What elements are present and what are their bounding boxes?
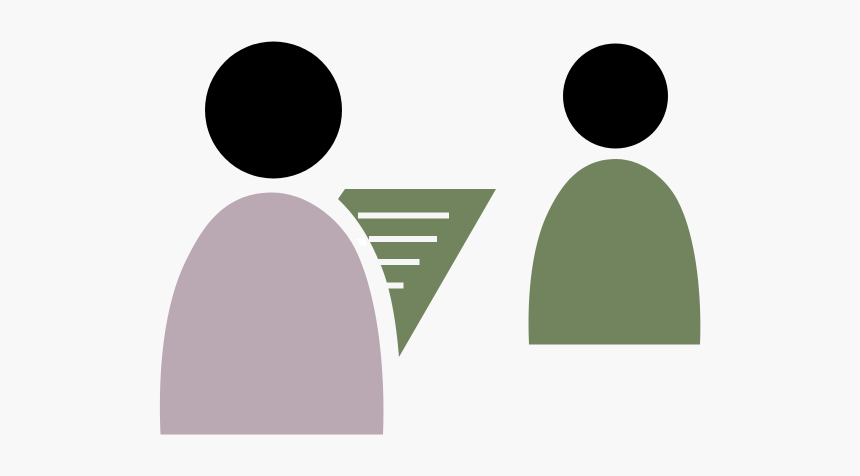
body: right figure [529,159,700,344]
head: right figure [563,44,668,148]
icon: triangular document [338,189,496,357]
head: left figure [205,42,342,178]
person: left figure [160,42,383,434]
person: right figure [529,44,700,344]
body: left figure [160,192,383,434]
